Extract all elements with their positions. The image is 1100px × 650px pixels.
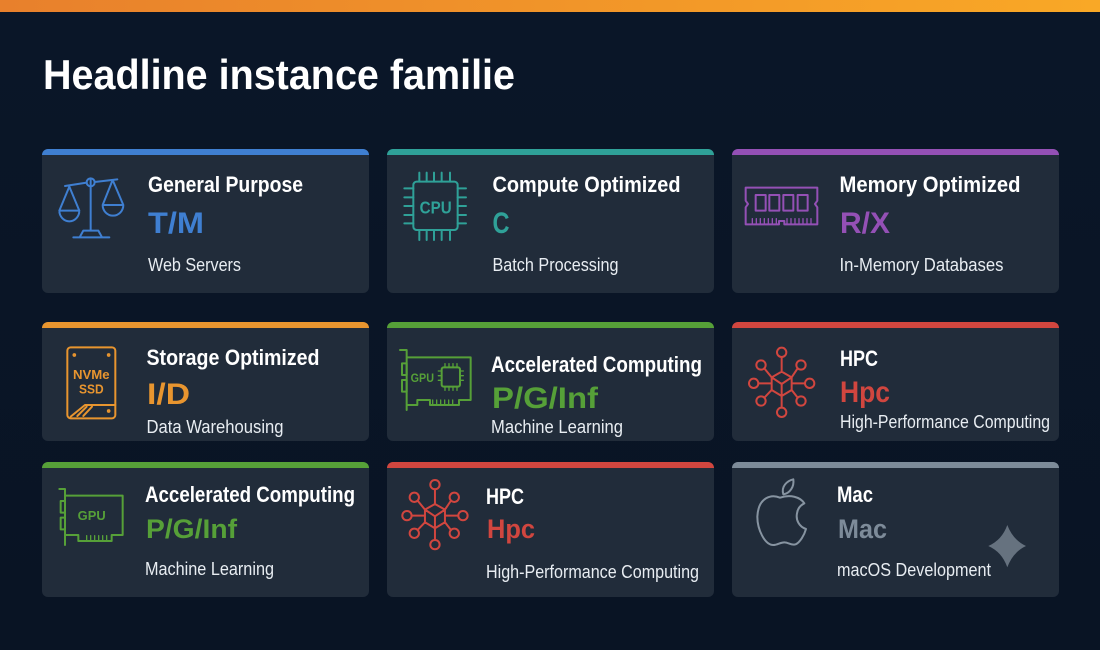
icon: CPU: [404, 173, 466, 240]
icon: HPC network cube: [749, 348, 814, 417]
title: Headline instance familie: [43, 51, 515, 98]
icon: GPU card with chip: GPU: [411, 371, 434, 385]
panel: General Purpose: [42, 149, 369, 293]
use case: Web Servers: [148, 255, 241, 275]
instance code: I/D: [147, 378, 190, 411]
instance code: Mac: [838, 514, 887, 544]
heading: Accelerated Computing: [145, 482, 355, 507]
panel: Memory Optimized: [732, 149, 1059, 293]
heading: HPC: [486, 484, 524, 509]
use case: Machine Learning: [145, 559, 274, 579]
use case: Machine Learning: [491, 417, 623, 437]
instance code: C: [492, 207, 510, 240]
icon: sparkle: [988, 525, 1026, 567]
icon: apple: [757, 479, 806, 545]
panel: HPC, row two: [732, 322, 1059, 441]
icon: balance scale: [59, 178, 123, 237]
icon: GPU card with chip: [400, 350, 471, 410]
icon: CPU: CPU: [420, 197, 452, 217]
heading: Mac: [837, 482, 873, 507]
panel: Accelerated Computing, row three: [42, 462, 369, 597]
use case: High-Performance Computing: [486, 562, 699, 582]
icon: HPC network cube: [402, 480, 468, 549]
heading: General Purpose: [148, 172, 303, 197]
icon: NVMe SSD: NVMe: [73, 368, 110, 382]
instance code: Hpc: [487, 514, 535, 544]
icon: GPU card: GPU: [78, 509, 106, 523]
panel: Accelerated Computing, row two: [387, 322, 714, 441]
heading: Memory Optimized: [840, 172, 1020, 197]
icon: RAM module: [746, 188, 817, 224]
icon: NVMe SSD: SSD: [79, 383, 104, 397]
panel: HPC, row three: [387, 462, 714, 597]
top accent bar: [0, 0, 1100, 12]
panel: Compute Optimized: [387, 149, 714, 293]
instance code: T/M: [148, 207, 204, 240]
heading: Storage Optimized: [146, 345, 320, 370]
instance code: R/X: [840, 207, 890, 240]
icon: NVMe SSD: [67, 347, 115, 418]
use case: High-Performance Computing: [840, 412, 1050, 432]
use case: macOS Development: [837, 560, 991, 580]
icon: GPU card: [59, 489, 123, 545]
instance code: Hpc: [840, 376, 890, 409]
instance code: P/G/Inf: [492, 382, 599, 415]
heading: HPC: [840, 346, 878, 371]
heading: Accelerated Computing: [491, 352, 702, 377]
panel: Storage Optimized: [42, 322, 369, 441]
panel: Mac: [732, 462, 1059, 597]
instance code: P/G/Inf: [146, 514, 238, 544]
use case: Data Warehousing: [146, 417, 284, 437]
heading: Compute Optimized: [492, 172, 680, 197]
use case: In-Memory Databases: [840, 255, 1004, 275]
use case: Batch Processing: [492, 255, 618, 275]
